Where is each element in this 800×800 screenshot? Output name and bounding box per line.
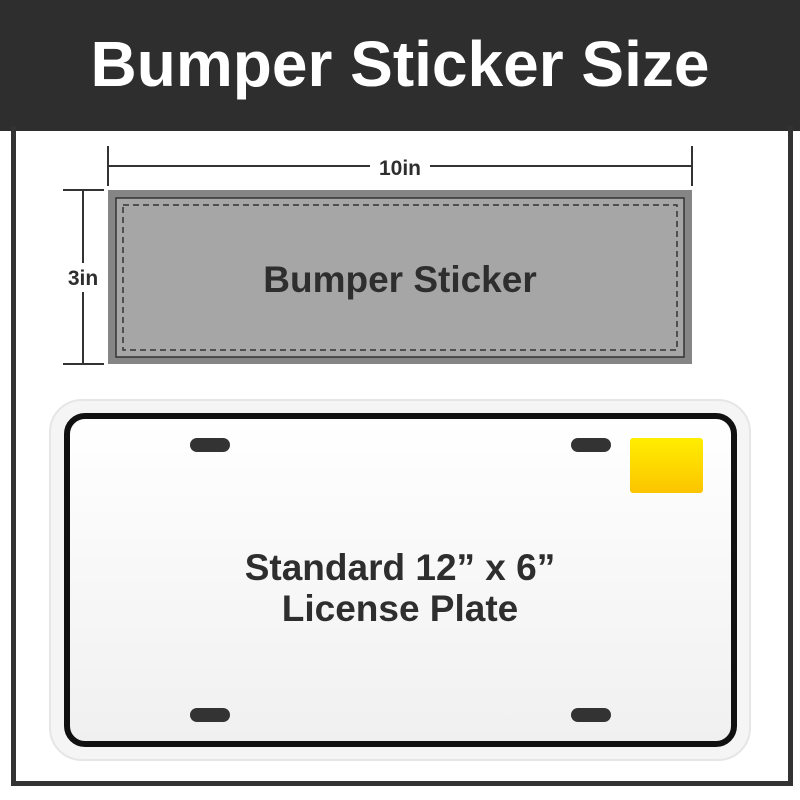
license plate: Standard 12” x 6” xyxy=(245,547,555,588)
dimension: height: 3in xyxy=(68,267,98,290)
license plate: License Plate xyxy=(282,588,518,629)
registration sticker xyxy=(630,438,703,493)
bumper sticker: Bumper Sticker xyxy=(263,259,537,300)
slots xyxy=(190,438,611,722)
header xyxy=(0,0,800,131)
title: Bumper Sticker Size xyxy=(91,28,709,100)
license plate xyxy=(50,400,750,760)
bumper sticker xyxy=(108,190,692,364)
dimension: width: 10in xyxy=(379,157,421,180)
